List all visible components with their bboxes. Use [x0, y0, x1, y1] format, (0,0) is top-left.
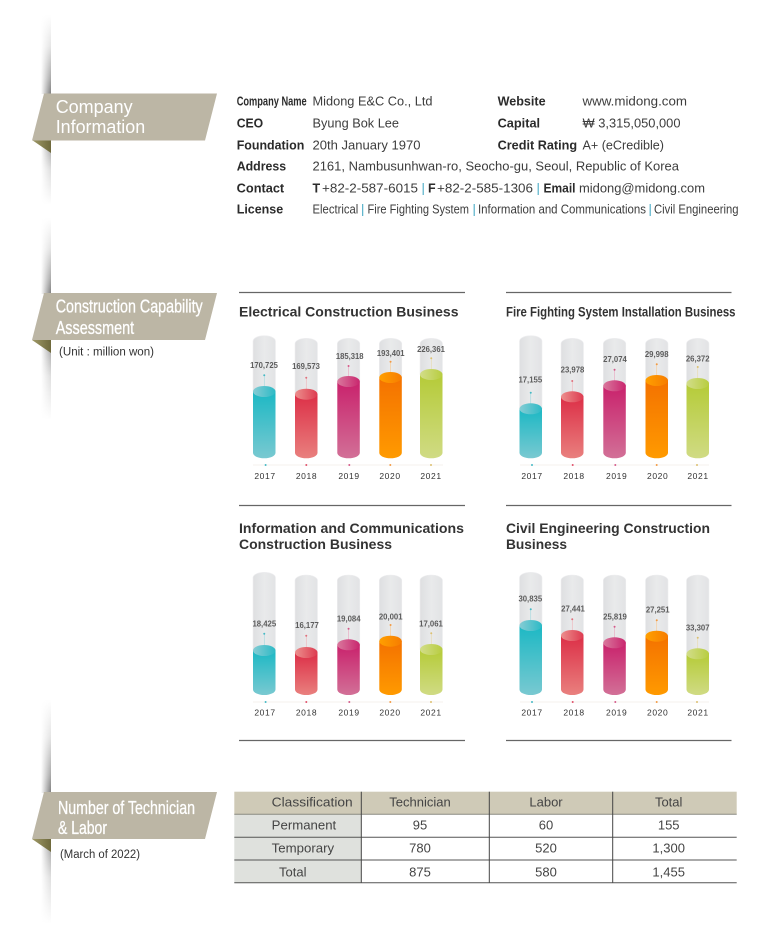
- table: technician and labor counts: 1,300: [652, 841, 685, 856]
- bar chart: fire fighting: 2020: [647, 471, 668, 481]
- bar chart: electrical: 193,401: [377, 349, 405, 358]
- bar chart: electrical: 226,361: [417, 345, 445, 354]
- company information details: www.midong.com: [581, 94, 687, 108]
- bar chart: electrical: [250, 336, 445, 481]
- bar chart: civil engineering: 27,441: [561, 604, 585, 613]
- bar chart: civil engineering: 2020: [647, 708, 668, 718]
- chart heading: Electrical Construction Business: [239, 304, 459, 320]
- bar chart: information and communications: 2017: [254, 708, 276, 718]
- section ribbon: Construction Capability Assessment: [32, 293, 217, 353]
- date note: (March of 2022): [60, 849, 140, 861]
- bar chart: fire fighting: 17,155: [518, 375, 543, 384]
- company information details: Foundation: [237, 138, 304, 152]
- company information details: midong@midong.com: [579, 181, 705, 195]
- company information details: Information and Communications: [478, 202, 646, 216]
- panel: Civil Engineering Construction Business: Business: [506, 536, 567, 552]
- table: technician and labor counts: 95: [413, 818, 427, 833]
- bar chart: civil engineering: 2017: [521, 708, 543, 718]
- company information details: Website: [498, 94, 546, 108]
- company information details: |: [648, 202, 652, 216]
- table: technician and labor counts: Technician: [389, 794, 451, 809]
- bar chart: electrical: 2017: [254, 471, 276, 481]
- bar chart: information and communications: 2019: [338, 708, 360, 718]
- section ribbon: Company Information: [32, 94, 217, 153]
- bar chart: civil engineering: [518, 572, 710, 718]
- company information details: +82-2-585-1306: [437, 181, 533, 195]
- section ribbon: Number of Technician & Labor: [32, 792, 217, 852]
- bar chart: information and communications: 18,425: [252, 619, 277, 628]
- unit note: (Unit : million won): [59, 346, 154, 358]
- panel: Information and Communications Construction Business: Construction Business: [239, 536, 392, 552]
- company information details: [237, 94, 739, 216]
- company information details: Email: [544, 181, 576, 195]
- company information details: T: [312, 181, 320, 195]
- bar chart: fire fighting: 2019: [606, 471, 627, 481]
- bar chart: civil engineering: 2021: [687, 708, 709, 718]
- table: technician and labor counts: Total: [655, 794, 683, 809]
- bar chart: civil engineering: 2019: [606, 708, 627, 718]
- bar chart: fire fighting: 2021: [687, 471, 709, 481]
- company information details: Civil Engineering: [654, 202, 739, 216]
- bar chart: civil engineering: 25,819: [603, 612, 627, 621]
- table: technician and labor counts: Classification: [272, 794, 353, 809]
- table: technician and labor counts: 875: [409, 864, 431, 879]
- panel: Fire Fighting System Installation Business: [506, 304, 736, 481]
- bar chart: electrical: 170,725: [250, 361, 278, 370]
- bar chart: information and communications: 17,061: [419, 619, 443, 628]
- bar chart: information and communications: 16,177: [295, 621, 319, 630]
- section ribbon: Construction Capability Assessment: Construction Capability: [56, 297, 203, 317]
- table: technician and labor counts: 580: [535, 864, 557, 879]
- bar chart: information and communications: [252, 572, 443, 718]
- company information details: Midong E&C Co., Ltd: [312, 94, 433, 108]
- bar chart: civil engineering: 30,835: [518, 594, 543, 603]
- table: technician and labor counts: 60: [539, 818, 553, 833]
- company information details: Capital: [498, 116, 540, 130]
- bar chart: civil engineering: 33,307: [686, 623, 710, 632]
- table: technician and labor counts: 780: [409, 841, 431, 856]
- company information details: ₩ 3,315,050,000: [582, 116, 681, 130]
- section ribbon: Number of Technician & Labor: Number of Technician: [58, 798, 195, 818]
- panel: Information and Communications Construction Business: [239, 520, 464, 718]
- chart heading: Civil Engineering Construction: [506, 520, 710, 536]
- company information details: A+ (eCredible): [582, 138, 664, 152]
- table: technician and labor counts: Total: [279, 864, 307, 879]
- bar chart: fire fighting: 23,978: [561, 365, 585, 374]
- company information details: |: [422, 180, 425, 195]
- table: technician and labor counts: 520: [535, 841, 557, 856]
- panel: Electrical Construction Business: [239, 304, 459, 481]
- company information details: Byung Bok Lee: [312, 116, 399, 130]
- company information details: |: [361, 202, 364, 216]
- company information details: +82-2-587-6015: [322, 181, 418, 195]
- table: technician and labor counts: [234, 792, 737, 883]
- bar chart: fire fighting: 2017: [521, 471, 543, 481]
- bar chart: electrical: 2019: [338, 471, 360, 481]
- bar chart: information and communications: 2020: [379, 708, 401, 718]
- bar chart: civil engineering: 27,251: [646, 605, 670, 614]
- bar chart: fire fighting: 29,998: [645, 350, 669, 359]
- chart heading: Information and Communications: [239, 520, 464, 536]
- company information details: License: [237, 202, 283, 216]
- company information details: |: [536, 180, 540, 195]
- bar chart: electrical: 2021: [420, 471, 442, 481]
- bar chart: information and communications: 2018: [296, 708, 317, 718]
- company information details: Credit Rating: [498, 138, 577, 152]
- table: technician and labor counts: Labor: [529, 794, 563, 809]
- table: technician and labor counts: Temporary: [272, 841, 335, 856]
- company information details: Address: [237, 160, 286, 174]
- company information details: Company Name: [237, 94, 307, 108]
- bar chart: fire fighting: 2018: [563, 471, 585, 481]
- bar chart: electrical: 169,573: [292, 362, 320, 371]
- company information details: Fire Fighting System: [368, 202, 469, 216]
- section ribbon: Number of Technician & Labor: & Labor: [58, 818, 107, 838]
- section ribbon: Company Information: Company: [56, 97, 133, 117]
- company information details: |: [472, 202, 476, 216]
- bar chart: information and communications: 2021: [420, 708, 442, 718]
- company information details: Electrical: [312, 202, 358, 216]
- company information details: F: [428, 181, 436, 195]
- panel: Civil Engineering Construction Business: [506, 520, 710, 718]
- company information details: 2161, Nambusunhwan-ro, Seocho-gu, Seoul, Republic of Korea: [312, 160, 679, 174]
- section ribbon: Company Information: Information: [56, 117, 145, 137]
- bar chart: civil engineering: 2018: [563, 708, 585, 718]
- bar chart: fire fighting: 26,372: [686, 354, 710, 363]
- bar chart: fire fighting: [518, 336, 710, 481]
- bar chart: electrical: 2018: [296, 471, 317, 481]
- table: technician and labor counts: 155: [658, 818, 680, 833]
- bar chart: electrical: 185,318: [336, 352, 364, 361]
- bar chart: information and communications: 20,001: [379, 613, 403, 622]
- company information details: Contact: [237, 181, 285, 195]
- company information details: CEO: [237, 116, 263, 130]
- company information details: 20th January 1970: [312, 138, 421, 152]
- bar chart: fire fighting: 27,074: [603, 355, 627, 364]
- table: technician and labor counts: Permanent: [272, 818, 337, 833]
- bar chart: electrical: 2020: [379, 471, 401, 481]
- table: technician and labor counts: 1,455: [652, 864, 685, 879]
- bar chart: information and communications: 19,084: [337, 614, 361, 623]
- section ribbon: Construction Capability Assessment: Assessment: [56, 318, 134, 338]
